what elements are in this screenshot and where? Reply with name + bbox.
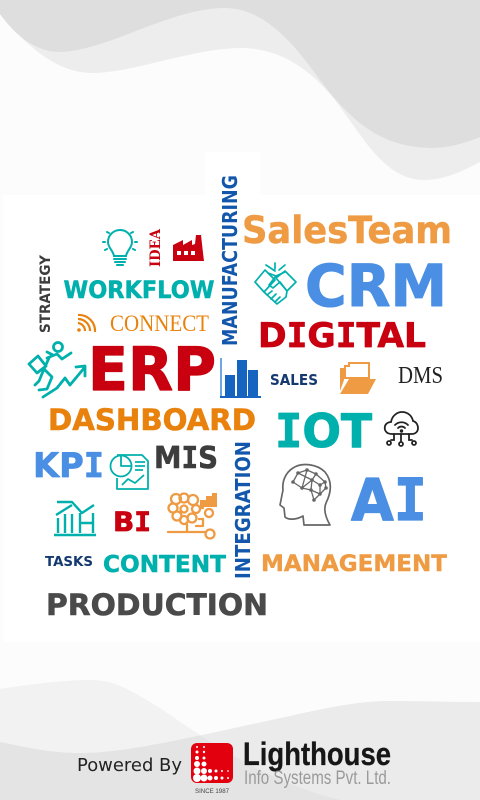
word: IDEA: IDEA [148, 228, 164, 267]
bottom wave, band [0, 701, 480, 800]
word: MANAGEMENT: MANAGEMENT [261, 552, 447, 577]
logo: Lighthouse: Lighthouse [243, 736, 391, 772]
word: STRATEGY: STRATEGY [38, 254, 54, 333]
logo mark [191, 743, 233, 783]
bottom wave, hill [0, 680, 340, 800]
icon: head with neural network [280, 465, 330, 525]
word: DIGITAL: DIGITAL [258, 316, 426, 356]
icon: folder [340, 363, 376, 394]
word: WORKFLOW: WORKFLOW [64, 276, 214, 304]
icon: light bulb [103, 230, 137, 265]
word: CONTENT: CONTENT [103, 552, 226, 578]
icon: bar chart [220, 358, 261, 398]
word: SalesTeam: SalesTeam [242, 209, 452, 252]
logo: Info Systems: Info Systems Pvt. Ltd. [244, 768, 391, 789]
icon: cloud network [385, 412, 418, 446]
word: SALES: SALES [270, 371, 318, 389]
word: DASHBOARD: DASHBOARD [48, 403, 256, 437]
word: MIS: MIS [154, 441, 218, 476]
logo: since 1987: SINCE 1987 [195, 788, 229, 795]
word: CRM: CRM [305, 252, 447, 320]
icon: pie report [110, 455, 148, 489]
word: AI: AI [351, 466, 427, 534]
label: powered by: Powered By [77, 755, 182, 776]
word: IOT: IOT [275, 404, 373, 458]
icon: brain with gears [168, 493, 217, 538]
top wave, dark [0, 0, 480, 148]
word: KPI: KPI [33, 446, 104, 486]
word: TASKS: TASKS [45, 554, 93, 570]
icon: rss signal [77, 315, 95, 332]
word: ERP: ERP [88, 335, 216, 405]
icon: line chart [54, 502, 96, 535]
word: MANUFACTURING: MANUFACTURING [218, 175, 242, 346]
top wave, light [0, 0, 480, 180]
word: DMS: DMS [398, 363, 443, 389]
icon: factory [173, 235, 204, 261]
bottom wave, overlap [0, 701, 480, 800]
word: CONNECT: CONNECT [110, 311, 209, 336]
icon: handshake [255, 263, 296, 304]
word: INTEGRATION: INTEGRATION [231, 441, 255, 579]
icon: runner with briefcase [29, 342, 85, 397]
word: BI: BI [113, 507, 151, 538]
word: PRODUCTION: PRODUCTION [46, 588, 268, 622]
